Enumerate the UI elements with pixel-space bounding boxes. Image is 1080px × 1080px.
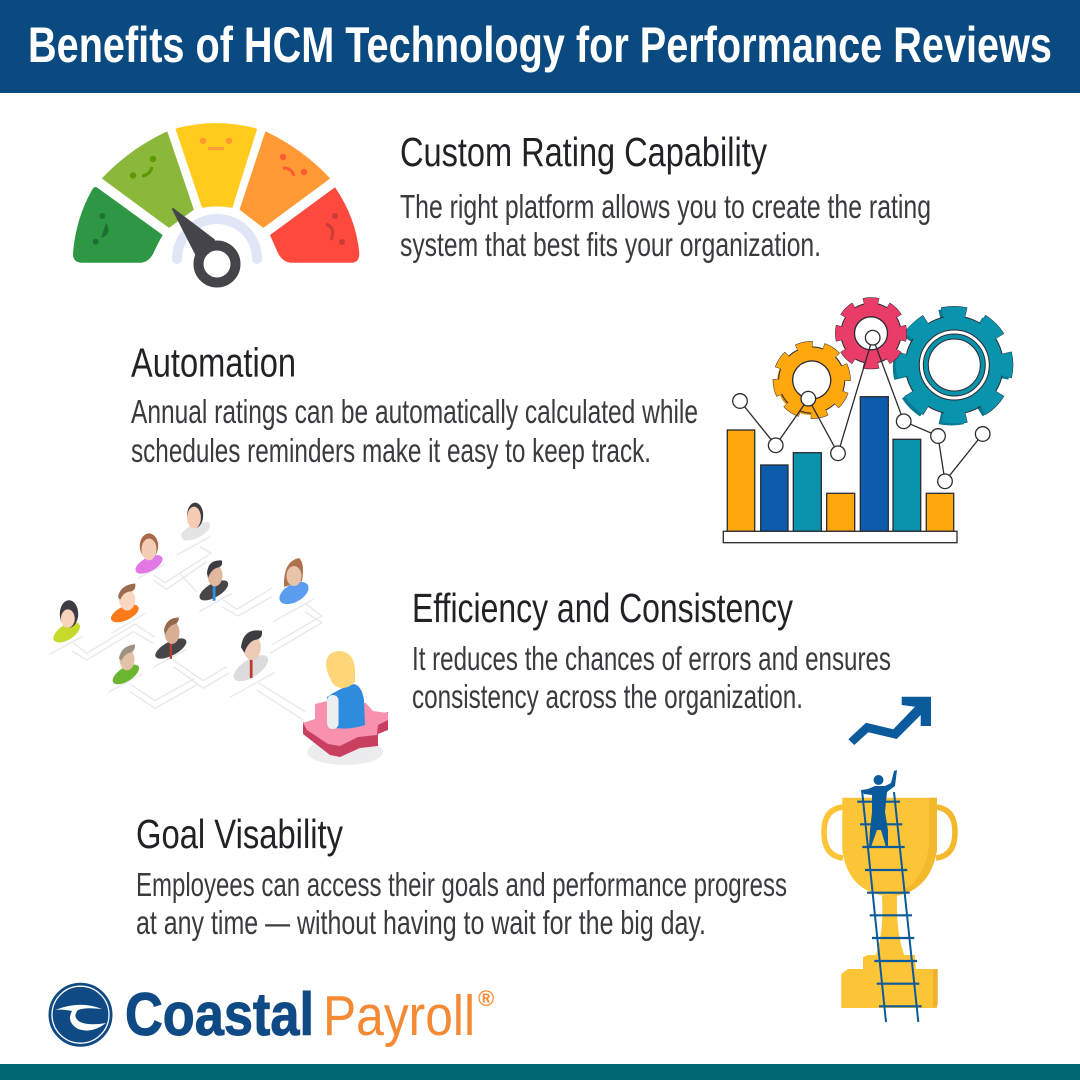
icon: gears and bar chart [723,302,1006,543]
body text: Employees can access their goals and performance progress [136,866,787,903]
person 6 [50,600,83,647]
body text: system that best fits your organization. [400,226,821,263]
icon: rating gauge [73,124,359,283]
logo mark [50,984,112,1046]
body text [136,866,787,941]
person 5 [108,584,141,626]
header band [0,0,1080,93]
trophy cup [842,798,937,897]
icon: trophy with ladder [824,770,955,1022]
icon: rising arrow [848,697,931,745]
gear: teal [899,313,1006,419]
body text: consistency across the organization. [412,678,803,715]
person 4 [276,558,312,609]
person 2 [133,533,165,578]
person on gear [303,651,388,765]
trophy handles [824,807,955,858]
heading: Efficiency and Consistency [412,585,793,631]
body text: schedules reminders make it easy to keep track. [131,432,651,469]
section: custom rating capability [400,129,931,263]
connector lines [50,537,322,720]
person 9 [230,630,272,686]
wordmark: Coastal [125,981,314,1048]
heading: Automation [131,340,296,386]
gear: orange [770,340,852,421]
body text: It reduces the chances of errors and ensures [412,640,891,677]
ladder [857,790,922,1022]
section: goal visability [136,811,787,941]
trophy base [841,955,938,1008]
trophy stem [875,896,905,957]
body text [400,188,931,263]
body text: Annual ratings can be automatically calculated while [131,393,698,430]
logo: Coastal Payroll: Payroll [323,984,475,1048]
person 7 [152,618,189,663]
illustration: org chart of people [50,503,388,765]
climbing person [862,770,897,847]
person 1 [181,503,210,541]
logo: Coastal Payroll: ® [478,986,494,1011]
body text [131,393,698,469]
heading: Goal Visability [136,811,343,857]
gauge faces [93,138,345,245]
line chart [733,330,990,489]
heading: Custom Rating Capability [400,129,767,175]
logo: Coastal Payroll [50,981,494,1048]
person 3 [196,560,231,604]
bars [723,397,957,543]
body text [412,640,891,715]
gear: pink [840,302,902,364]
footer band [0,1064,1080,1080]
gauge needle [173,209,236,282]
body text: at any time — without having to wait for the big day. [136,904,706,941]
section: automation [131,340,698,469]
person 8 [110,644,142,688]
section: efficiency and consistency [412,585,891,715]
